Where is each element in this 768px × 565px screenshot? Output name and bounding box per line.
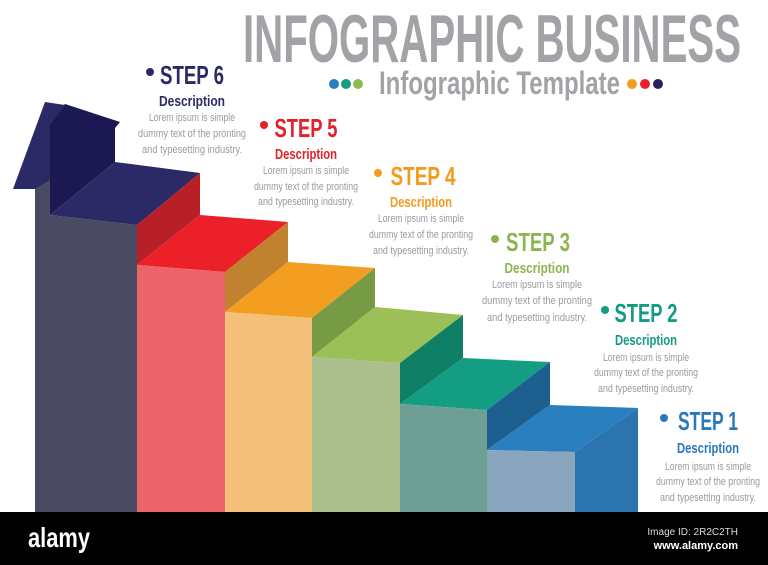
step 3 text: STEP 3 bbox=[506, 227, 570, 257]
step 6 arrow bar bbox=[13, 102, 200, 512]
footer bar: Image ID: 2R2C2TH bbox=[647, 527, 738, 538]
step 3 text: and typesetting industry. bbox=[487, 312, 587, 324]
step 3 text: dummy text of the pronting bbox=[482, 295, 592, 307]
step 4 text: Description bbox=[390, 194, 452, 211]
step 2 text bbox=[594, 298, 698, 395]
step 6 text: STEP 6 bbox=[160, 60, 224, 90]
step 1 blue bbox=[487, 362, 638, 512]
step 6 text: and typesetting industry. bbox=[142, 144, 242, 156]
step 1 text: Description bbox=[677, 440, 739, 457]
step 3 text bbox=[482, 227, 592, 324]
step 6 text bbox=[138, 60, 246, 156]
footer bar: alamy bbox=[28, 522, 90, 553]
step 5 red bbox=[137, 173, 288, 512]
step 4 text: STEP 4 bbox=[390, 161, 456, 191]
step 1 text bbox=[656, 406, 760, 504]
step 4 text: Lorem ipsum is simple bbox=[378, 213, 464, 225]
step 5 text: and typesetting industry. bbox=[258, 196, 354, 208]
step 6 text: Description bbox=[159, 93, 225, 110]
staircase chart bbox=[13, 102, 638, 512]
step 5 text: Description bbox=[275, 146, 337, 163]
step 5 text bbox=[254, 113, 358, 208]
step 2 text: dummy text of the pronting bbox=[594, 367, 698, 379]
step 4 text bbox=[369, 161, 473, 257]
step 4 orange bbox=[225, 222, 375, 512]
step 4 text: and typesetting industry. bbox=[373, 245, 469, 257]
step 5 text: dummy text of the pronting bbox=[254, 181, 358, 193]
step 4 text: dummy text of the pronting bbox=[369, 229, 473, 241]
step 3 text: Lorem ipsum is simple bbox=[492, 279, 582, 291]
subtitle: Infographic Template bbox=[379, 65, 620, 101]
step 5 text: Lorem ipsum is simple bbox=[263, 165, 349, 177]
step 6 text: Lorem ipsum is simple bbox=[149, 112, 235, 124]
step 2 text: and typesetting industry. bbox=[598, 383, 694, 395]
step 3 text: Description bbox=[504, 260, 570, 277]
footer bar bbox=[0, 512, 768, 565]
step 3 green bbox=[312, 268, 463, 512]
step 1 text: STEP 1 bbox=[678, 406, 738, 436]
step 6 text: dummy text of the pronting bbox=[138, 128, 246, 140]
step 2 text: STEP 2 bbox=[614, 298, 678, 328]
step 2 text: Lorem ipsum is simple bbox=[603, 352, 689, 364]
step 2 text: Description bbox=[615, 332, 677, 349]
footer bar: www.alamy.com bbox=[653, 540, 738, 552]
step 5 text: STEP 5 bbox=[274, 113, 338, 143]
step 2 teal bbox=[400, 315, 550, 512]
